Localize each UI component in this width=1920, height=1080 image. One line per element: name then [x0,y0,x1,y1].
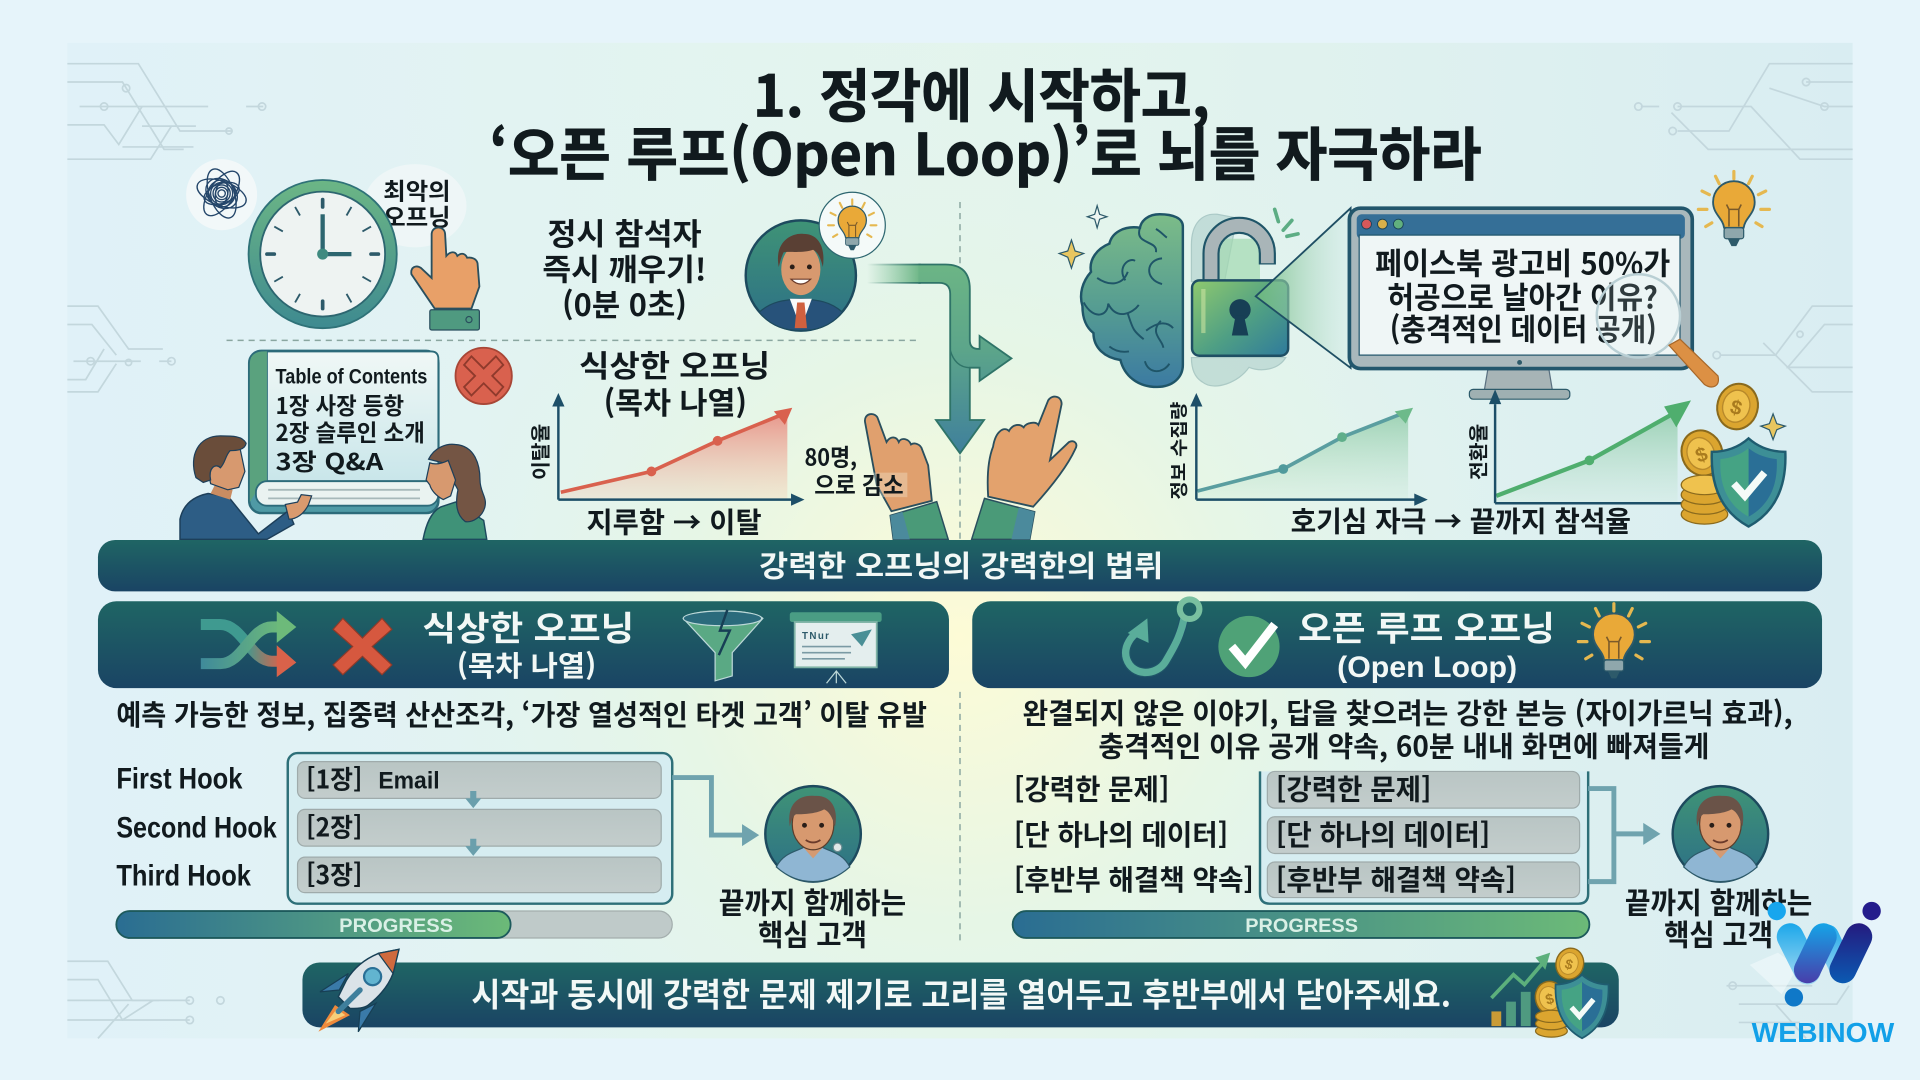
icon: red x [456,348,512,404]
text: wake attendees [542,209,707,325]
callout: worst opening: 오프닝 [383,198,451,232]
icon: left raised hand [865,414,948,539]
panel header: open loop opening [972,599,1822,688]
man figure [180,436,312,539]
list: chapter stack: [2장] [306,807,362,844]
title [490,49,1482,192]
icon: clock [249,180,397,328]
icon: magnifier [1597,274,1718,387]
text: wake attendees: 정시 참석자 [547,209,702,254]
description: open loop: 완결되지 않은 이야기, 답을 찾으려는 강한 본능 (자이가르닉 효과), [1022,692,1793,733]
list: chapter stack [288,753,672,904]
dashed dividers [227,202,960,945]
title: 1. 정각에 시작하고, [753,49,1210,133]
list: chapter stack: [3장] [306,855,362,892]
heading: stale opening: (목차 나열) [604,378,747,423]
labels: open loop elements: [강력한 문제] [1014,768,1169,809]
icon: coins and shield [1675,379,1785,527]
caption: core customer: 끝까지 함께하는 [719,880,906,922]
caption: curiosity to full attendance: 호기심 자극 → 끝까지 참석율 [1291,499,1631,540]
arrow: to core customer [672,778,759,846]
text: partly hidden count: 80명, [804,438,857,472]
description: open loop: 충격적인 이유 공개 약속, 60분 내내 화면에 빠져들게 [1098,725,1709,766]
banner: section heading: 강력한 오프닝의 강력한의 법뤼 [759,544,1163,586]
title: ‘오픈 루프(Open Loop)’로 뇌를 자극하라 [490,108,1482,192]
icon: presenter avatar with bulb [746,192,885,331]
heading text: 식상한 오프닝 [422,600,634,650]
chart: exit rate: 지루함 → 이탈 [587,501,762,542]
caption: core customer: 핵심 고객 [1664,912,1773,954]
icon: tangled thoughts bubble [186,159,257,230]
labels: hooks: First Hook [116,763,243,796]
chart: information retention [1165,393,1428,506]
labels: hooks [116,763,277,892]
logo: WEBINOW [1750,902,1895,1048]
progress bar: full: PROGRESS [1245,915,1358,937]
text: wake attendees: 즉시 깨우기! [542,244,707,289]
panel header: stale opening [98,600,949,688]
icon: sparkles [1059,206,1107,268]
chart: exit rate: 이탈율 [524,424,553,480]
woman figure [423,444,487,539]
icon: monitor with teaser: 페이스북 광고비 50%가 [1375,238,1670,283]
chart: conversion rate [1462,389,1696,503]
icon: right raised hand [972,397,1076,539]
avatar: core customer [765,786,861,882]
banner: section heading [98,540,1822,591]
icon: broken funnel [683,610,763,681]
book: table of contents [249,351,438,513]
list: open loop stack: [강력한 문제] [1276,768,1431,809]
icon: presentation slide [790,612,882,683]
icon: light bulb [1698,171,1769,246]
caption: core customer: 핵심 고객 [758,912,867,954]
arrow: green branching arrow [867,264,1011,453]
book: table of contents: 1장 사장 등항 [276,387,404,421]
heading: stale opening: 식상한 오프닝 [579,341,770,386]
labels: open loop elements: [단 하나의 데이터] [1014,813,1228,854]
heading: stale opening [579,341,770,423]
icon: presentation slide: TNur [802,631,829,642]
text: wake attendees: (0분 0초) [562,280,687,325]
caption: core customer [1625,880,1812,954]
callout: worst opening: 최악의 [383,173,451,207]
labels: hooks: Second Hook [116,812,277,845]
caption: core customer [719,880,906,954]
icon: bulb [1578,604,1649,678]
book: table of contents: 3장 Q&A [276,443,383,477]
banner: takeaway: 시작과 동시에 강력한 문제 제기로 고리를 열어두고 후반부에서 닫아주세요. [471,969,1451,1017]
beam from lock to monitor [1256,208,1351,368]
heading text: (목차 나열) [457,644,596,685]
icon: red cross [333,618,392,675]
description: stale opening: 예측 가능한 정보, 집중력 산산조각, ‘가장 열성적인 타겟 고객’ 이탈 유발 [116,693,927,734]
arrow: bracket to core customer [1588,789,1660,882]
list: open loop stack: [단 하나의 데이터] [1276,813,1490,854]
list: open loop stack: [후반부 해결책 약속] [1276,858,1516,899]
list: chapter stack: [1장] [306,760,362,797]
chart: exit rate [524,393,804,542]
text: reduced to: 으로 감소 [814,466,904,500]
heading text [422,600,634,685]
labels: open loop elements: [후반부 해결책 약속] [1014,858,1254,899]
avatar: core customer [1673,786,1768,882]
description: open loop [1022,692,1793,766]
chart: information retention: 정보 수집량 [1165,402,1191,500]
icon: monitor with teaser: (충격적인 데이터 공개) [1390,304,1657,349]
icon: monitor with teaser [1349,208,1692,399]
book: table of contents: 2장 슬루인 소개 [276,414,425,448]
heading text: 오픈 루프 오프닝 [1298,600,1555,650]
heading text: (Open Loop) [1337,651,1517,684]
progress bar: full [1013,911,1589,938]
progress bar: partial [116,911,672,938]
banner: takeaway [302,962,1619,1027]
labels: hooks: Third Hook [116,859,252,892]
icon: rocket [318,949,399,1032]
heading text [1298,600,1555,684]
book: table of contents: Table of Contents [276,365,427,388]
icon: open padlock [1192,209,1298,356]
icon: monitor with teaser: 허공으로 날아간 이유? [1387,273,1658,318]
caption: core customer: 끝까지 함께하는 [1625,880,1812,922]
list: open loop stack [1260,768,1588,904]
labels: open loop elements [1014,768,1254,899]
chart: conversion rate: 전환율 [1462,424,1491,480]
progress bar: partial: PROGRESS [339,915,453,937]
logo: WEBINOW: WEBINOW [1752,1017,1895,1048]
icon: hook [1126,599,1199,672]
icon: shuffle arrows [201,611,296,677]
callout: worst opening [364,164,467,247]
icon: check badge [1218,616,1280,677]
list: chapter stack: Email [378,768,440,795]
icon: brain [1081,214,1286,387]
icon: growth chart, coins and shield [1491,945,1609,1038]
icon: pointing hand [411,227,479,330]
